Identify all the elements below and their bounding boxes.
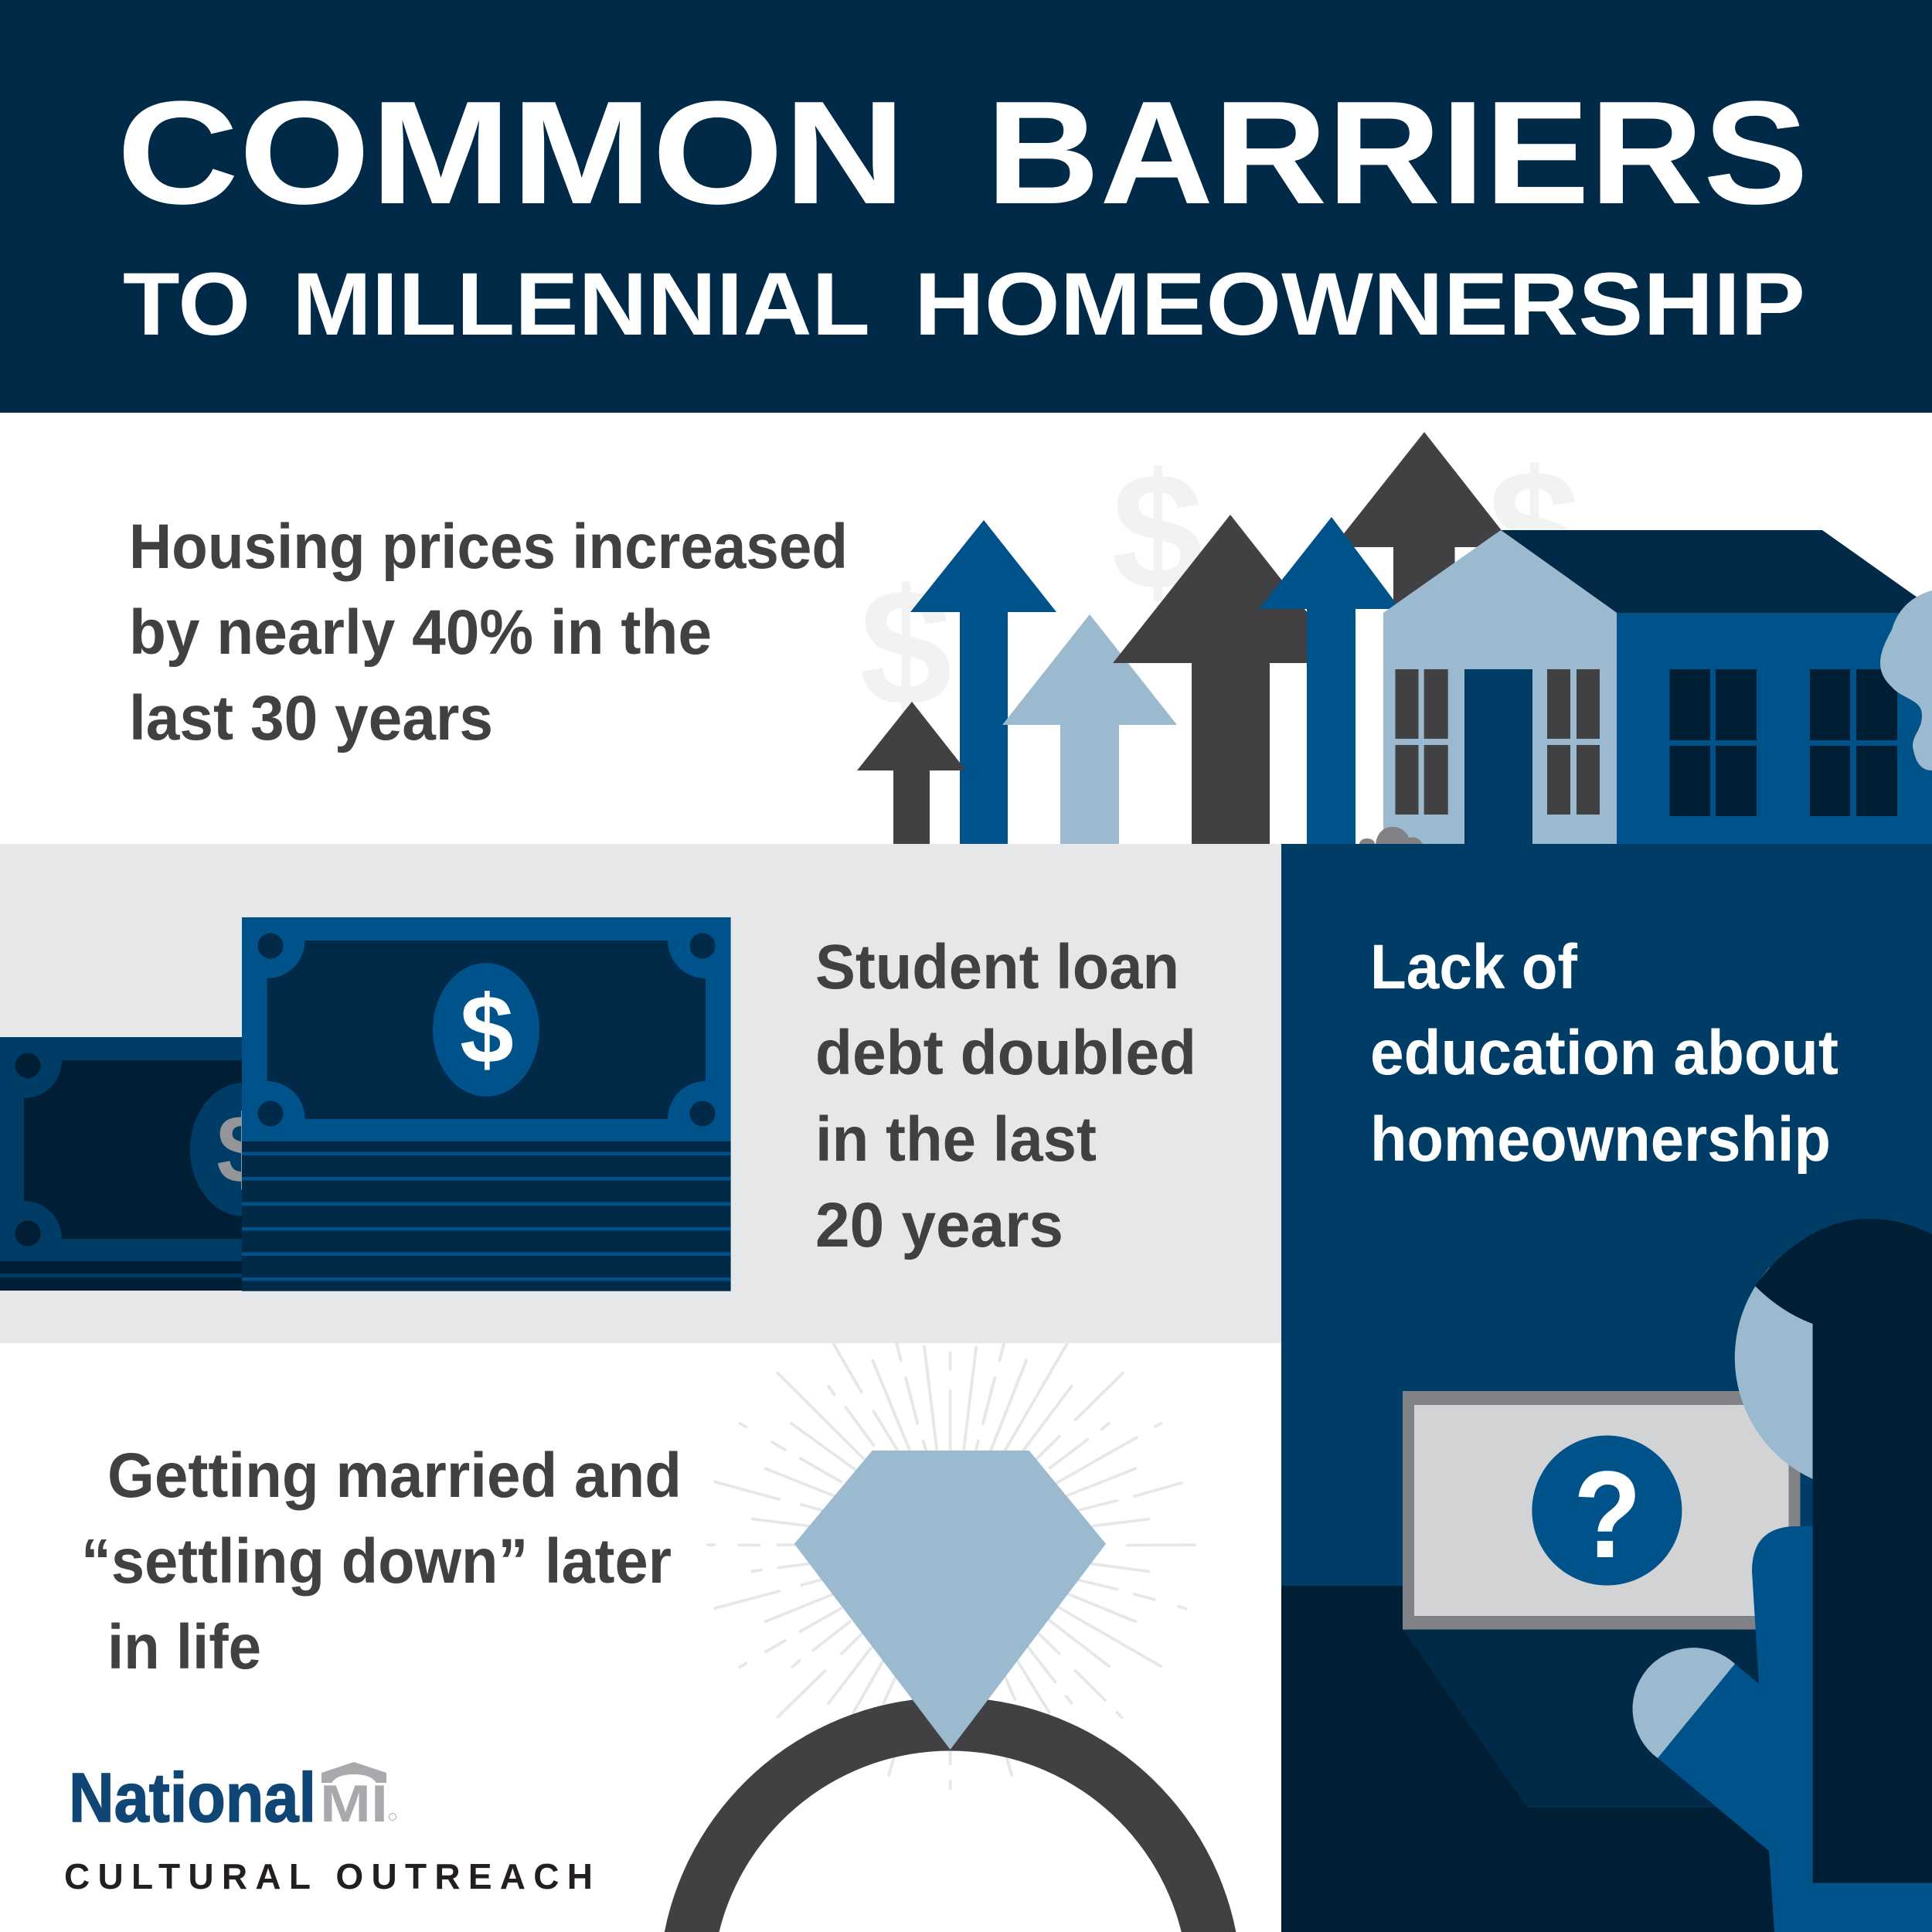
text: marriage: in life xyxy=(107,1612,261,1682)
text: marriage: “settling down” later xyxy=(81,1526,672,1597)
back bill stack: $ xyxy=(216,1096,270,1203)
front bill stack: $ xyxy=(460,976,514,1083)
ring band xyxy=(665,1697,1236,1932)
text: student loan debt: 20 years xyxy=(815,1190,1063,1260)
front bill stack xyxy=(242,917,731,1291)
house xyxy=(1383,530,1932,844)
title: BARRIERS xyxy=(986,71,1808,235)
background dollar signs: $ xyxy=(859,554,952,740)
text: lack of education: education about xyxy=(1370,1018,1838,1088)
back bill stack xyxy=(0,1037,297,1291)
background dollar signs xyxy=(859,435,1580,740)
laptop shadow xyxy=(1403,1629,1777,1808)
text: student loan debt: debt doubled xyxy=(815,1018,1196,1088)
subtitle: TO xyxy=(123,255,250,354)
subtitle: HOMEOWNERSHIP xyxy=(914,255,1805,354)
tree xyxy=(1880,590,1932,770)
text: lack of education xyxy=(1370,932,1838,1175)
subtitle: MILLENNIAL xyxy=(292,255,870,354)
tagline: cultural outreach: CULTURAL OUTREACH xyxy=(64,1856,593,1896)
panel: marriage xyxy=(81,1440,1236,1932)
text: housing prices: by nearly 40% in the xyxy=(129,597,712,668)
sparkle rays behind diamond xyxy=(708,1343,1195,1788)
background dollar signs: $ xyxy=(1488,435,1580,621)
text: housing prices: Housing prices increased xyxy=(129,512,848,582)
text: housing prices xyxy=(129,512,848,753)
laptop screen with question mark xyxy=(1403,1391,1801,1630)
logo: National MI: MI xyxy=(320,1774,388,1833)
text: housing prices: last 30 years xyxy=(129,683,493,753)
text: lack of education: Lack of xyxy=(1370,932,1578,1002)
bush xyxy=(1359,827,1423,844)
text: marriage: Getting married and xyxy=(107,1440,682,1511)
person at laptop xyxy=(1633,1219,1932,1932)
panel: student loan debt xyxy=(0,844,1281,1343)
panel: lack of education xyxy=(1281,844,1932,1932)
diamond xyxy=(794,1451,1106,1750)
title: COMMON xyxy=(117,71,906,235)
text: lack of education: homeownership xyxy=(1370,1104,1831,1175)
logo: National MI: National xyxy=(69,1760,316,1837)
rising arrows xyxy=(857,432,1515,844)
text: student loan debt xyxy=(815,932,1196,1260)
background dollar signs: $ xyxy=(1111,438,1204,624)
laptop screen with question mark: ? xyxy=(1573,1445,1641,1583)
text: student loan debt: Student loan xyxy=(815,932,1179,1002)
text: marriage xyxy=(81,1440,682,1682)
text: student loan debt: in the last xyxy=(815,1104,1097,1175)
panel: housing prices xyxy=(129,432,1932,844)
header banner xyxy=(0,0,1932,413)
